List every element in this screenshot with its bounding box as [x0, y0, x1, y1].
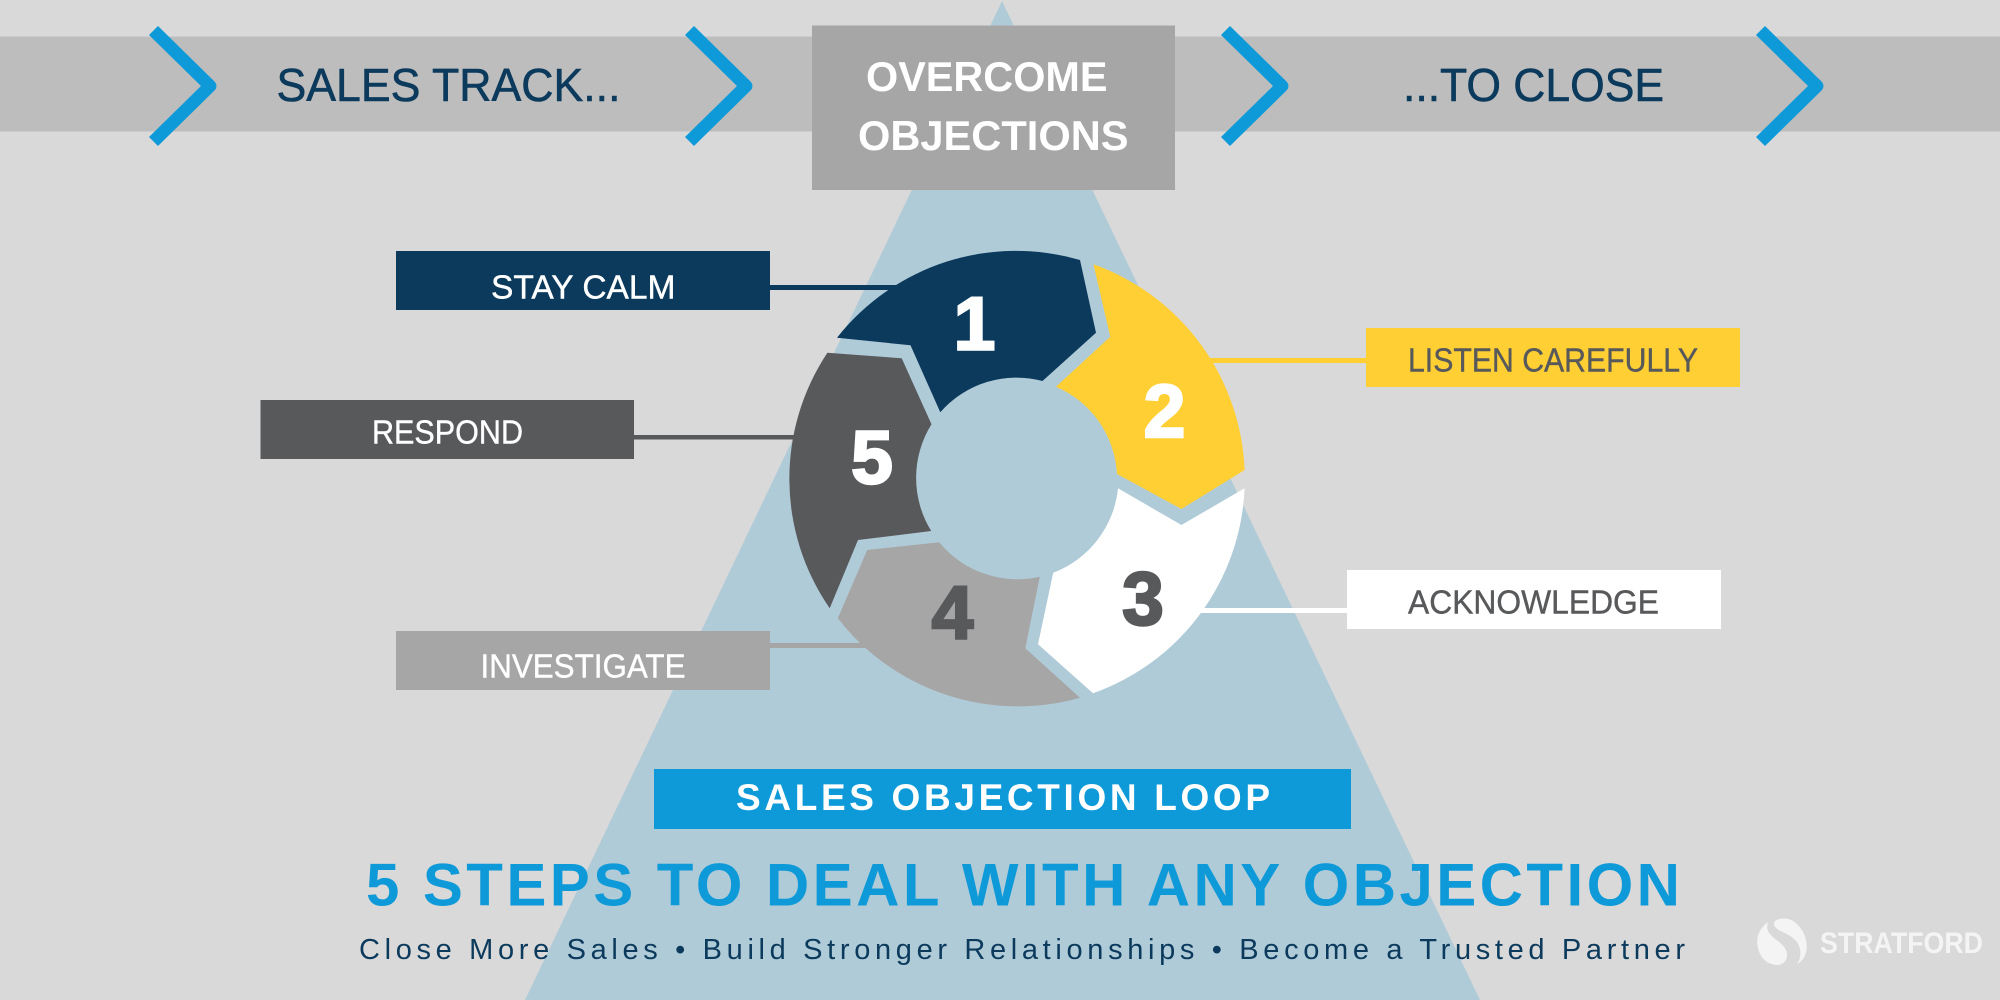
- label: acknowledge: [1347, 570, 1721, 629]
- label: acknowledge: ACKNOWLEDGE: [1408, 584, 1659, 620]
- banner: sales objection loop: SALES OBJECTION LOOP: [736, 777, 1270, 818]
- icon: chevron arrow 1: [149, 26, 216, 146]
- segment 5: dark grey: 5: [851, 416, 893, 500]
- connector: respond: [634, 435, 804, 440]
- icon: chevron arrow 2: [685, 26, 752, 146]
- segment 4: grey: 4: [932, 570, 974, 654]
- track text: sales track: SALES TRACK...: [276, 59, 620, 111]
- icon: chevron arrow 4: [1756, 26, 1824, 146]
- segment 1: navy: [837, 251, 1096, 412]
- label: stay calm: [396, 251, 770, 310]
- segment 2: yellow: 2: [1144, 369, 1185, 453]
- segment 2: yellow: [1056, 264, 1245, 509]
- label: listen carefully: [1366, 328, 1740, 387]
- banner: sales objection loop: [654, 769, 1351, 829]
- panel: overcome objections: [812, 26, 1175, 190]
- segment 5: dark grey: [789, 353, 932, 608]
- panel: overcome objections: OVERCOME: [866, 53, 1108, 100]
- segment 3: white: [1038, 488, 1245, 693]
- top track band: [0, 36, 2000, 132]
- title: 5 STEPS TO DEAL WITH ANY OBJECTION: [366, 852, 1680, 918]
- label: respond: RESPOND: [372, 414, 523, 450]
- logo: stratford: STRATFORD: [1820, 927, 1983, 960]
- connector: stay calm: [770, 285, 905, 290]
- connector: listen carefully: [1190, 358, 1366, 363]
- connector: investigate: [770, 643, 880, 648]
- connector: acknowledge: [1190, 608, 1347, 613]
- segment 1: navy: 1: [954, 282, 995, 366]
- track text: to close: ...TO CLOSE: [1403, 59, 1664, 111]
- background triangle: [525, 1, 1480, 1000]
- label: investigate: [396, 631, 770, 690]
- label: respond: [260, 400, 634, 459]
- label: listen carefully: LISTEN CAREFULLY: [1408, 342, 1698, 378]
- label: investigate: INVESTIGATE: [480, 648, 686, 684]
- segment 4: grey: [838, 542, 1080, 706]
- panel: overcome objections: OBJECTIONS: [858, 112, 1128, 159]
- icon: chevron arrow 3: [1221, 26, 1288, 146]
- label: stay calm: STAY CALM: [491, 268, 676, 306]
- logo: stratford: [1757, 919, 1983, 965]
- subtitle: Close More Sales • Build Stronger Relationships • Become a Trusted Partner: [359, 934, 1685, 966]
- segment 3: white: 3: [1122, 556, 1164, 640]
